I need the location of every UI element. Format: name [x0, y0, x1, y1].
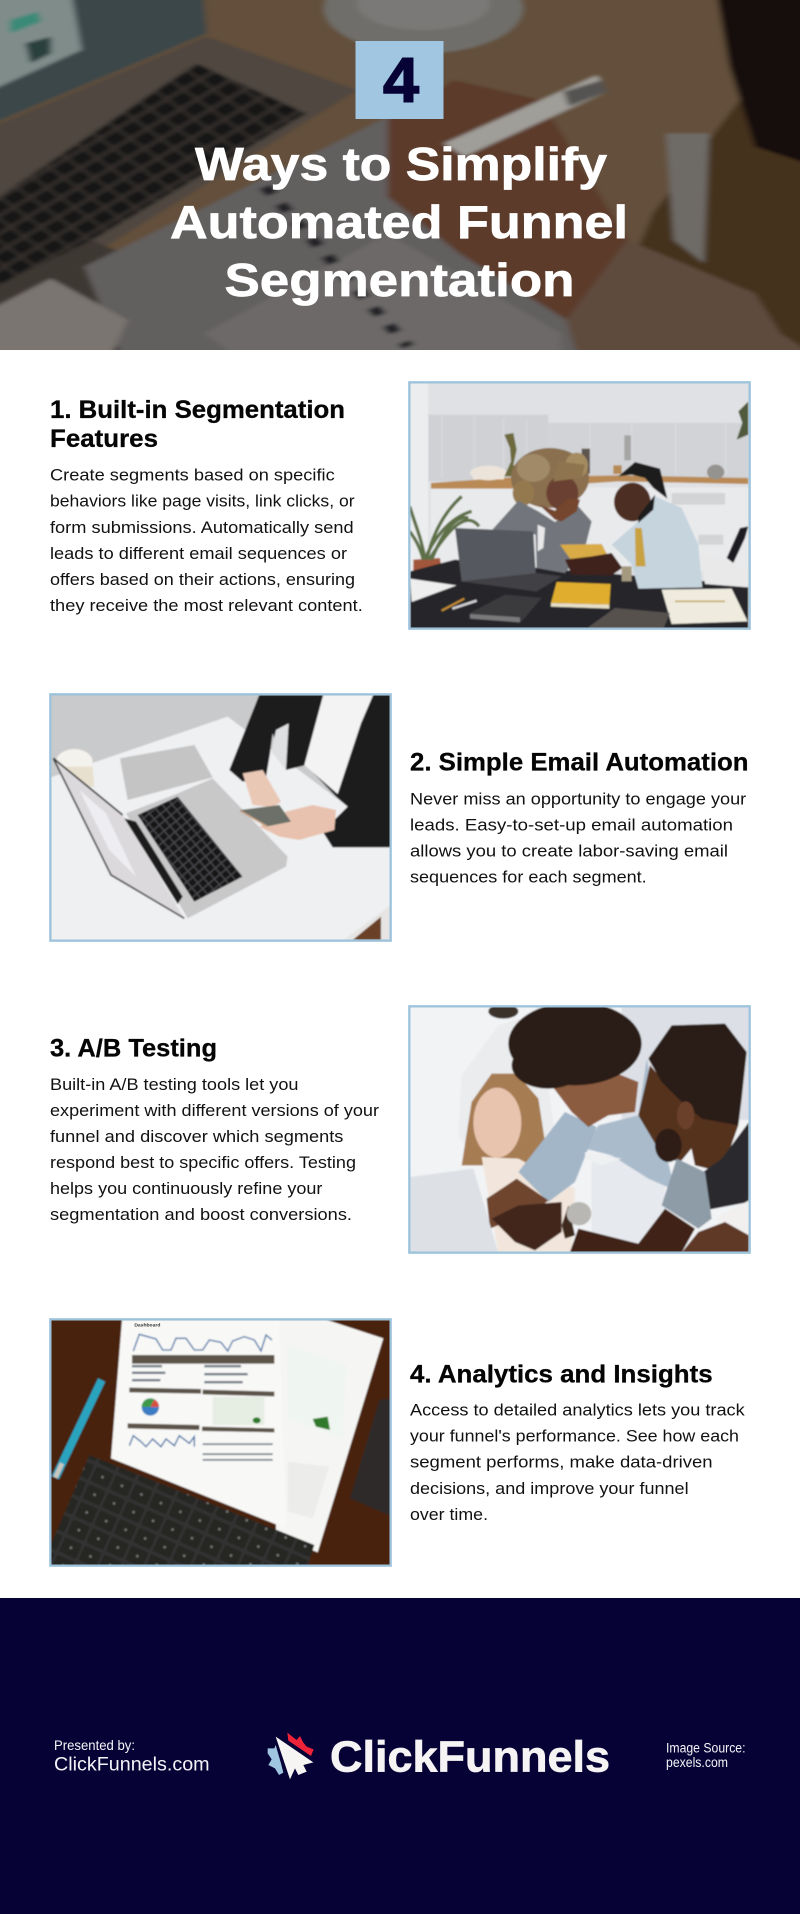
section 2 photo: phone and laptop on a white desk — [46, 690, 396, 946]
section 1 body text: Create segments based on specific — [50, 467, 335, 485]
section 2 body text: leads. Easy-to-set-up email automation — [410, 816, 733, 834]
section 4 photo: printed analytics reports with keyboard and pen: Dashboard — [134, 1322, 160, 1328]
title: Segmentation — [224, 254, 574, 306]
title: Ways to Simplify — [195, 138, 607, 190]
icon: clickfunnels cursor logo — [268, 1733, 314, 1779]
section 1 body text — [50, 467, 363, 615]
section 3 body text: helps you continuously refine your — [50, 1180, 323, 1198]
footer band — [0, 1598, 800, 1914]
section 1 body text: form submissions. Automatically send — [50, 519, 354, 537]
section 3 body text: funnel and discover which segments — [50, 1128, 343, 1146]
section 2 body text: allows you to create labor-saving email — [410, 843, 728, 861]
section 2 heading: 2. Simple Email Automation — [410, 749, 748, 777]
number badge — [356, 41, 444, 119]
section 4 body text: your funnel's performance. See how each — [410, 1428, 739, 1446]
presented by credit: Presented by: — [54, 1737, 135, 1753]
section 1 body text: they receive the most relevant content. — [50, 597, 363, 615]
section 2 body text: Never miss an opportunity to engage your — [410, 790, 747, 808]
presented by credit: ClickFunnels.com — [54, 1755, 210, 1776]
image source credit — [666, 1741, 746, 1770]
section 2: simple email automation — [46, 690, 748, 946]
title: Automated Funnel — [170, 196, 628, 248]
section 4 body text: Access to detailed analytics lets you track — [410, 1402, 746, 1420]
section 2 body text — [410, 790, 747, 887]
section 3 heading: 3. A/B Testing — [50, 1035, 217, 1063]
section 4 photo: printed analytics reports with keyboard and pen — [46, 1315, 396, 1571]
section 1 heading: 1. Built-in Segmentation — [50, 396, 345, 424]
section 1 body text: behaviors like page visits, link clicks, or — [50, 493, 355, 511]
section 1 body text: leads to different email sequences or — [50, 545, 348, 563]
header background photo: laptop, notebook and hand — [0, 0, 800, 370]
section 1 body text: offers based on their actions, ensuring — [50, 571, 355, 589]
section 2 body text: sequences for each segment. — [410, 869, 647, 887]
section 3 body text: segmentation and boost conversions. — [50, 1206, 352, 1224]
section 1 heading: Features — [50, 425, 158, 453]
section 4 body text: over time. — [410, 1506, 488, 1524]
section 4 body text: decisions, and improve your funnel — [410, 1480, 689, 1498]
section 1 heading — [50, 396, 345, 453]
title — [170, 138, 628, 306]
presented by credit — [54, 1737, 210, 1776]
section 3: a/b testing — [50, 1002, 755, 1258]
section 4 body text — [410, 1402, 746, 1524]
number badge: 4 — [383, 46, 419, 116]
section 3 body text: Built-in A/B testing tools let you — [50, 1076, 298, 1094]
section 3 body text: experiment with different versions of your — [50, 1102, 380, 1120]
section 1: built-in segmentation features — [50, 378, 755, 634]
section 4: analytics and insights — [46, 1315, 746, 1571]
section 4 heading: 4. Analytics and Insights — [410, 1360, 713, 1388]
section 3 body text — [50, 1076, 380, 1224]
section 3 body text: respond best to specific offers. Testing — [50, 1154, 356, 1172]
image source credit: Image Source: — [666, 1741, 746, 1756]
section 3 photo: three colleagues at a laptop — [405, 1002, 755, 1258]
section 1 photo: two colleagues at a table — [405, 378, 755, 634]
clickfunnels wordmark: ClickFunnels — [330, 1733, 610, 1782]
header banner — [0, 0, 800, 370]
section 4 body text: segment performs, make data-driven — [410, 1454, 713, 1472]
image source credit: pexels.com — [666, 1755, 728, 1770]
